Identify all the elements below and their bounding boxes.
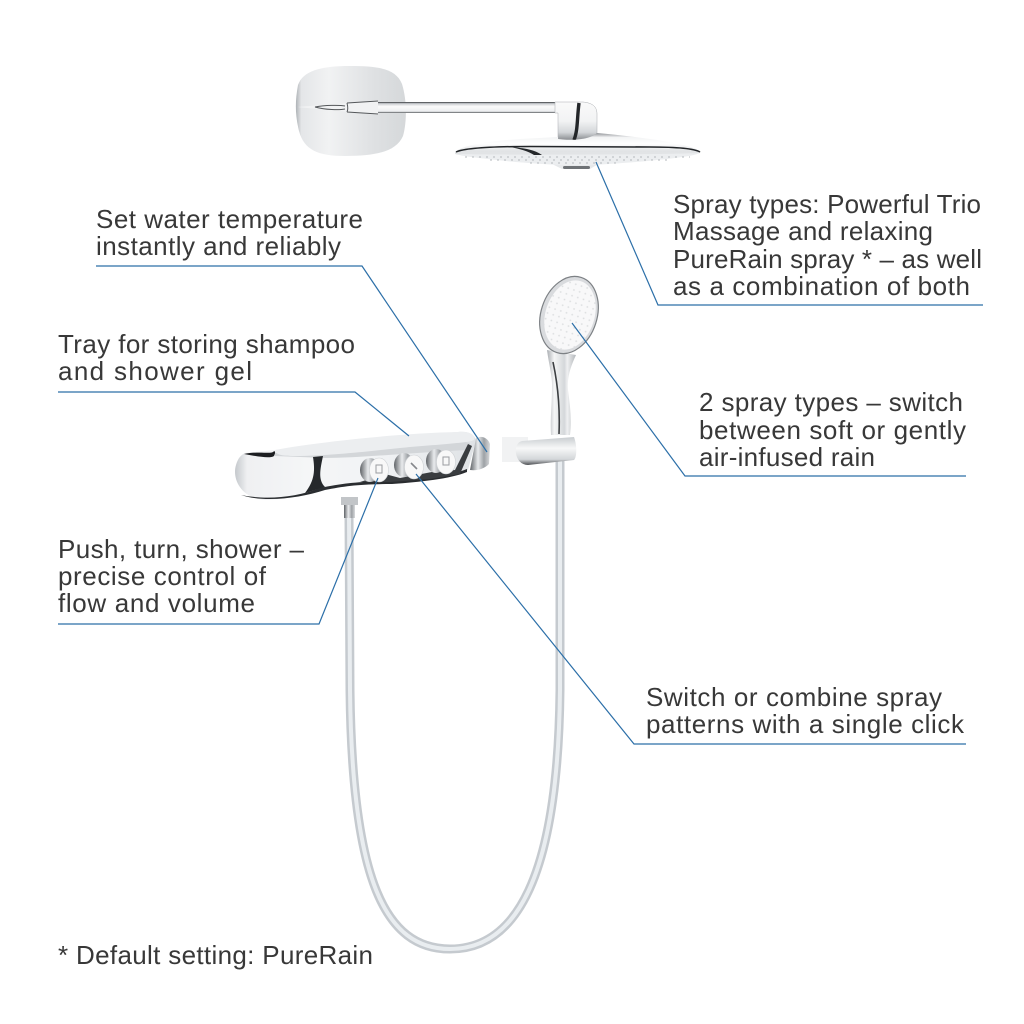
callout: overhead spray types: Spray types: Powerful Trio (673, 189, 981, 219)
footnote: * Default setting: PureRain (58, 940, 373, 970)
dark strips under buttons (360, 444, 472, 482)
button 2 (394, 453, 424, 479)
handle reflection (553, 362, 559, 434)
rim reflection (456, 146, 700, 152)
lower dark edge (241, 469, 467, 499)
callout: push turn shower: precise control of (58, 561, 267, 591)
callout: tray (58, 329, 409, 436)
callout: hand shower spray types: 2 spray types – switch (699, 387, 963, 417)
spray face with nozzles (457, 153, 700, 165)
callout: water temperature: Set water temperature (96, 204, 363, 234)
thermostat body (235, 432, 490, 500)
callout: switch spray patterns (416, 474, 966, 744)
callout: overhead spray types (596, 162, 983, 305)
overhead shower (296, 66, 701, 169)
callout: hand shower spray types (572, 323, 966, 476)
callout: switch spray patterns: Switch or combine spray (646, 682, 942, 712)
callout: push turn shower: flow and volume (58, 588, 255, 618)
chrome reflection (305, 456, 325, 493)
handle (547, 350, 576, 435)
wall plate (296, 66, 406, 156)
callout: hand shower spray types: between soft or gently (699, 415, 966, 445)
arm elbow (555, 102, 597, 140)
wall holder (502, 437, 576, 465)
band under tray (275, 442, 470, 458)
callout: overhead spray types: PureRain spray * – as well (673, 244, 982, 274)
hose (349, 460, 560, 949)
tray (275, 432, 474, 456)
spray face (536, 274, 604, 356)
callout: tray: and shower gel (58, 356, 252, 386)
arm spike and collar (298, 100, 378, 115)
callout: push turn shower (58, 478, 378, 624)
callout: tray: Tray for storing shampoo (58, 329, 355, 359)
callout: switch spray patterns: patterns with a single click (646, 709, 965, 739)
button 1 (360, 458, 388, 482)
collar outline (315, 101, 378, 114)
temperature handle (470, 437, 490, 470)
dark strip top-left (244, 451, 275, 457)
center reflection (510, 147, 542, 155)
nozzle (563, 166, 590, 169)
button 3 (426, 449, 456, 474)
hand shower (530, 269, 608, 435)
shower arm (378, 102, 560, 113)
callout: push turn shower: Push, turn, shower – (58, 534, 305, 564)
shower head (455, 133, 701, 169)
callout: water temperature: instantly and reliably (96, 231, 341, 261)
head (530, 269, 608, 361)
callout: water temperature (96, 204, 487, 452)
callout: hand shower spray types: air-infused rain (699, 442, 875, 472)
callout: overhead spray types: Massage and relaxing (673, 216, 933, 246)
hose connector (341, 497, 358, 518)
callout: overhead spray types: as a combination of both (673, 271, 970, 301)
